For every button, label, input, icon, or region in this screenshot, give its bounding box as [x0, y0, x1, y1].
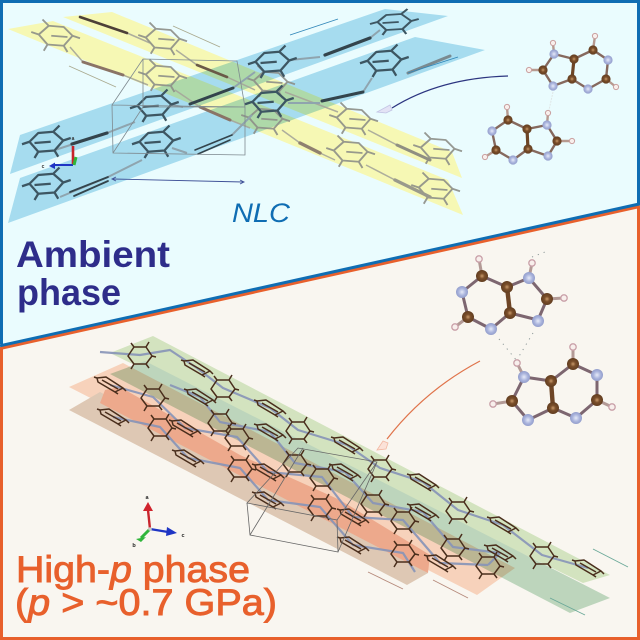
- hydrogen bond dots: [499, 252, 545, 361]
- crystal molecules: [94, 342, 604, 579]
- yellow plane molecules: [31, 20, 462, 205]
- blue plane edge-on molecules: [70, 38, 450, 196]
- axes: high-p: c: [181, 533, 185, 539]
- heading: High-p phase: [15, 549, 277, 623]
- yellow plane edge-on molecules: [80, 17, 430, 197]
- blue molecular planes: [8, 9, 485, 223]
- heading: Ambient phase: Ambient: [16, 234, 170, 275]
- panel: high-pressure phase: [15, 252, 628, 623]
- orange molecular planes: [69, 363, 515, 595]
- axes: high-p: [132, 495, 185, 549]
- curved arrow: ambient: [377, 76, 508, 113]
- axes: high-p: b: [132, 543, 136, 549]
- salmon overlap of orange planes: [100, 387, 430, 573]
- heading: High-p phase: High-p phase: [16, 549, 250, 590]
- molecule: ambient upper: [526, 33, 619, 94]
- panel: ambient phase: [0, 0, 640, 346]
- heading: Ambient phase: phase: [17, 272, 121, 313]
- molecule: ambient lower: [482, 92, 575, 165]
- molecule: high-p upper: [452, 256, 567, 335]
- connecting molecular chains: [100, 350, 588, 572]
- curved arrow: high-p: [377, 361, 480, 450]
- heading: Ambient phase: [16, 234, 170, 313]
- heading: High-p phase: (p > ~0.7 GPa): [15, 582, 277, 623]
- unit cell: [112, 59, 245, 155]
- direction arrows: [368, 549, 628, 615]
- axes: ambient: a: [72, 136, 75, 142]
- axes: high-p: a: [145, 495, 149, 501]
- axes: ambient: c: [42, 164, 45, 170]
- blue plane molecules: [22, 9, 419, 200]
- axes: ambient: [42, 136, 76, 170]
- panel background: [0, 0, 640, 346]
- unit cell: [247, 448, 377, 552]
- direction arrows: [69, 19, 458, 184]
- green molecular planes: [110, 336, 610, 613]
- label: NLC: NLC: [232, 198, 291, 228]
- molecule: high-p lower: [490, 344, 615, 426]
- yellow molecular planes: [8, 12, 463, 215]
